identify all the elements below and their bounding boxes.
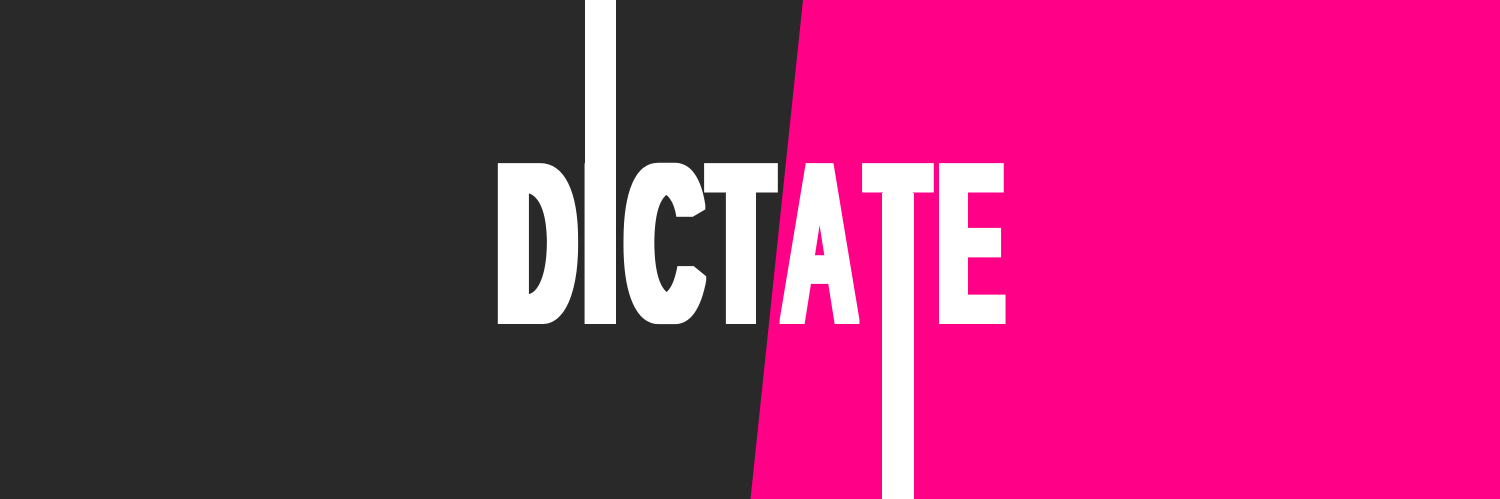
white vertical bar: top, through letter I [585, 0, 616, 324]
wordmark: DICTATE: C [627, 118, 701, 368]
pink diagonal panel [750, 0, 1500, 499]
wordmark: DICTATE: T [711, 117, 771, 371]
wordmark: DICTATE: D [499, 115, 575, 371]
wordmark: DICTATE [499, 115, 1001, 371]
wordmark: DICTATE: A [782, 116, 857, 371]
wordmark: DICTATE: I [588, 116, 607, 371]
wordmark: DICTATE: E [941, 115, 1001, 371]
wordmark: DICTATE: T [869, 116, 927, 370]
white vertical bar: bottom, through second letter T [882, 193, 914, 499]
